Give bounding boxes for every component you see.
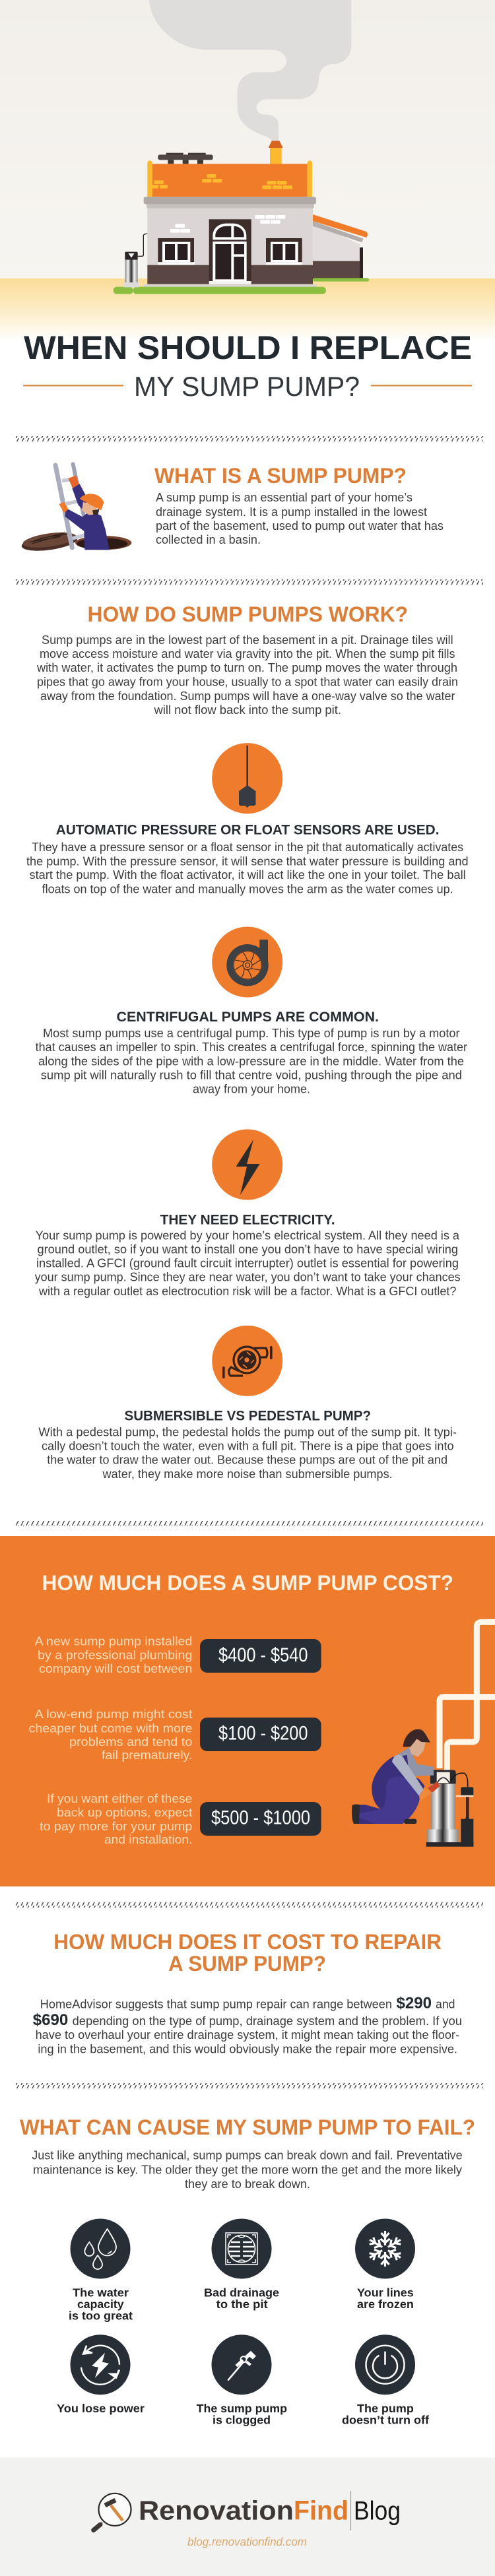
text block: ground outlet, so if you want to install one you don’t have to have special wiring <box>37 1242 458 1256</box>
cost row: new pump: A new sump pump installed <box>35 1634 192 1648</box>
cost row: new pump: company will cost between <box>39 1661 192 1675</box>
text block: the pump. With the pressure sensor, it will sense that water pressure is building and <box>26 854 469 868</box>
text block: along the sides of the pipe with a low-pressure are in the middle. Water from the <box>38 1054 464 1068</box>
text block: part of the basement, used to pump out water that has <box>156 519 444 532</box>
cause: pump does not turn off: The pump <box>357 2402 414 2415</box>
panel: cost of a sump pump <box>0 1536 495 1886</box>
icon: pump housing <box>212 1326 282 1396</box>
cost row: new pump <box>35 1634 321 1675</box>
cause: frozen lines: Your lines <box>357 2286 414 2300</box>
text block: with a regular outlet as electrocution risk will be a factor. What is a GFCI outlet? <box>38 1284 456 1298</box>
panel: automatic pressure or float sensors <box>26 743 469 896</box>
logo icon: magnifier with hammer <box>94 2494 131 2530</box>
text block <box>36 1026 467 1095</box>
cost row: back up options <box>40 1791 321 1846</box>
title <box>23 329 472 402</box>
cost row: low-end pump: $100 - $200 <box>218 1723 308 1745</box>
text block <box>32 2148 463 2191</box>
panel: what can cause failure <box>20 2115 475 2427</box>
text block: water, they make more noise than submersible pumps. <box>102 1467 393 1481</box>
panel: what is a sump pump <box>20 464 444 554</box>
subheading: CENTRIFUGAL PUMPS ARE COMMON. <box>116 1010 379 1025</box>
cost row: low-end pump: A low-end pump might cost <box>35 1707 192 1721</box>
text block: Your sump pump is powered by your home’s electrical system. All they need is a <box>36 1228 460 1242</box>
title: WHEN SHOULD I REPLACE <box>24 329 472 366</box>
cost row: back up options: If you want either of these <box>47 1791 192 1805</box>
icon: lightning bolt <box>212 1130 282 1200</box>
cause: water capacity: capacity <box>77 2298 124 2311</box>
subheading: THEY NEED ELECTRICITY. <box>160 1213 335 1227</box>
text block: Most sump pumps use a centrifugal pump. This type of pump is run by a motor <box>43 1026 460 1040</box>
cost row: back up options: and installation. <box>104 1832 192 1846</box>
cost row: low-end pump: cheaper but come with more <box>29 1721 192 1735</box>
text block: will not flow back into the sump pit. <box>154 703 341 717</box>
text block: cally doesn’t touch the water, even with a full pit. There is a pipe that goes into <box>42 1439 454 1453</box>
text block <box>156 490 444 546</box>
logo wordmark: Blog <box>354 2496 401 2525</box>
text block <box>38 1425 457 1481</box>
cause: pump does not turn off <box>342 2334 429 2427</box>
heading <box>53 1930 442 1976</box>
heading: HOW MUCH DOES A SUMP PUMP COST? <box>42 1571 453 1595</box>
text block <box>26 840 469 896</box>
cost row: back up options: to pay more for your pump <box>40 1819 192 1833</box>
title: MY SUMP PUMP? <box>134 371 360 402</box>
text block: Sump pumps are in the lowest part of the basement in a pit. Drainage tiles will <box>42 633 453 647</box>
cause: water capacity <box>69 2218 133 2323</box>
cause: clogged pump <box>197 2334 287 2427</box>
text block: Just like anything mechanical, sump pumps can break down and fail. Preventative <box>32 2148 463 2162</box>
text block: maintenance is key. The older they get the more worn the get and the more likely <box>33 2162 463 2176</box>
panel: submersible vs pedestal <box>38 1326 457 1481</box>
text block: move access moisture and water via gravity into the pit. When the sump pit fills <box>40 647 455 660</box>
text block: depending on the type of pump, drainage system and the problem. If you <box>73 2014 462 2028</box>
panel: they need electricity <box>35 1130 461 1298</box>
logo wordmark: Renovation <box>139 2495 294 2525</box>
cause: bad drainage: to the pit <box>216 2298 268 2311</box>
text block: ing in the basement, and this would obviously make the repair more expensive. <box>38 2042 457 2055</box>
text block: that causes an impeller to spin. This creates a centrifugal force, spinning the water <box>36 1040 467 1054</box>
text block: collected in a basin. <box>156 532 261 546</box>
cost row: back up options: $500 - $1000 <box>211 1807 310 1829</box>
footer <box>0 2457 495 2576</box>
cost row: new pump: by a professional plumbing <box>38 1648 192 1661</box>
text block <box>33 1995 462 2055</box>
text block: $290 <box>396 1995 432 2012</box>
heading: HOW MUCH DOES IT COST TO REPAIR <box>53 1930 442 1954</box>
website url: blog.renovationfind.com <box>187 2535 307 2548</box>
text block: sump pit will naturally rush to fill that centre void, pushing through the pipe and <box>41 1068 462 1082</box>
text block: they are to break down. <box>185 2177 310 2191</box>
cause: frozen lines <box>355 2218 415 2311</box>
text block: pipes that go away from your house, usually to a spot that water can easily drain <box>37 675 458 689</box>
heading: WHAT CAN CAUSE MY SUMP PUMP TO FAIL? <box>20 2115 475 2139</box>
cause: clogged pump: The sump pump <box>197 2402 287 2415</box>
text block: installed. A GFCI (ground fault circuit interrupter) outlet is essential for powering <box>36 1256 459 1270</box>
text block <box>35 1228 461 1298</box>
cost row: low-end pump: problems and tend to <box>69 1735 192 1749</box>
text block: drainage system. It is a pump installed in the lowest <box>156 505 427 519</box>
heading: HOW DO SUMP PUMPS WORK? <box>87 602 408 626</box>
icon: worker climbing out of a manhole <box>20 464 131 554</box>
cost row: low-end pump: fail prematurely. <box>102 1748 192 1762</box>
text block: with water, it activates the pump to turn on. The pump moves the water through <box>36 660 457 674</box>
subheading: AUTOMATIC PRESSURE OR FLOAT SENSORS ARE USED. <box>56 822 439 838</box>
cost row: back up options: back up options, expect <box>57 1805 192 1819</box>
text block: floats on top of the water and manually moves the arm as the water comes up. <box>42 882 453 896</box>
cause: water capacity: The water <box>73 2286 129 2300</box>
text block: away from your home. <box>193 1081 310 1095</box>
illustration: plumber fitting a pump <box>352 1622 495 1847</box>
text block: away from the foundation. Sump pumps will have a one-way valve so the water <box>40 689 455 703</box>
cause: bad drainage <box>204 2218 279 2311</box>
logo wordmark <box>139 2491 401 2530</box>
text block: start the pump. With the float activator, it will act like the one in your toilet. The ball <box>29 868 466 882</box>
text block: your sump pump. Since they are near water, you don’t want to take your chances <box>35 1270 461 1284</box>
subheading: SUBMERSIBLE VS PEDESTAL PUMP? <box>124 1409 371 1424</box>
house <box>114 141 369 294</box>
text block: the water to draw the water out. Because these pumps are out of the pit and <box>47 1452 447 1466</box>
icon: centrifugal impeller <box>212 926 282 998</box>
panel: centrifugal pumps <box>36 926 467 1095</box>
hero illustration: house with smoke <box>0 0 495 340</box>
cause: bad drainage: Bad drainage <box>204 2286 279 2300</box>
text block: $690 <box>33 2011 68 2029</box>
cause: frozen lines: are frozen <box>357 2298 414 2311</box>
text block <box>36 633 458 717</box>
cause: lose power: You lose power <box>57 2402 145 2415</box>
heading: WHAT IS A SUMP PUMP? <box>154 464 407 488</box>
text block: A sump pump is an essential part of your home’s <box>156 490 412 504</box>
text block: With a pedestal pump, the pedestal holds the pump out of the sump pit. It typi- <box>38 1425 457 1438</box>
heading: A SUMP PUMP? <box>168 1952 326 1976</box>
text block: and <box>436 1997 455 2011</box>
text block: have to overhaul your entire drainage system, it might mean taking out the floor- <box>36 2028 459 2042</box>
cause: clogged pump: is clogged <box>213 2414 271 2427</box>
text block: They have a pressure sensor or a float sensor in the pit that automatically activates <box>32 840 463 854</box>
smoke from chimney <box>149 0 351 141</box>
text block: HomeAdvisor suggests that sump pump repair can range between <box>40 1997 392 2011</box>
cost row: new pump: $400 - $540 <box>218 1644 308 1666</box>
cost row: low-end pump <box>29 1707 321 1762</box>
cause: lose power <box>57 2334 145 2415</box>
panel: how do sump pumps work <box>36 602 458 717</box>
cause: pump does not turn off: doesn’t turn off <box>342 2414 429 2427</box>
logo wordmark: Find <box>294 2495 348 2525</box>
cause: water capacity: is too great <box>69 2309 133 2323</box>
panel: repair cost <box>33 1930 462 2055</box>
icon: float sensor <box>212 743 282 814</box>
